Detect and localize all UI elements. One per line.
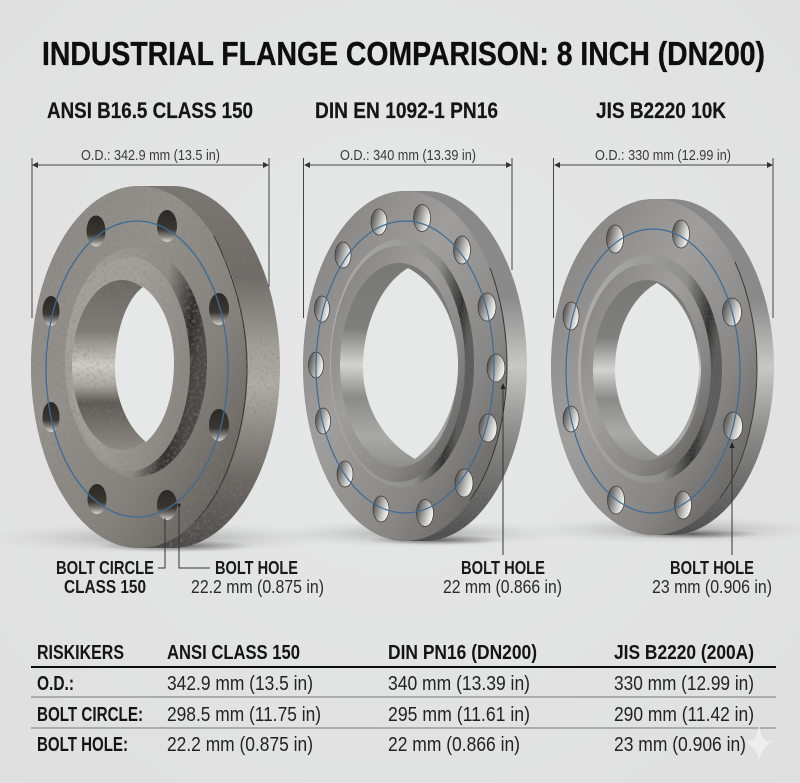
row: bolt circle: 290 mm (11.42 in) [614,704,754,726]
flange: JIS B2220 10K [551,199,774,535]
callout: DIN bolt hole [443,383,562,597]
table header: RISKIKERS [37,642,124,664]
table header: DIN PN16 (DN200) [388,642,537,664]
heading: JIS: JIS B2220 10K [596,98,726,123]
flange: ANSI B16.5 Class 150 [31,186,280,548]
callout: bolt circle class 150: BOLT CIRCLE [56,557,154,578]
bolt circle [46,221,228,517]
row: bolt hole: 22 mm (0.866 in) [388,734,520,756]
callout: bolt circle class 150: CLASS 150 [64,576,146,597]
table header [37,642,754,664]
bore opening [363,268,458,459]
callout: DIN bolt hole: 22 mm (0.866 in) [443,577,562,597]
bolt circle [566,229,740,513]
heading: DIN: DIN EN 1092-1 PN16 [315,98,498,123]
dimension: ANSI outer diameter: O.D.: 342.9 mm (13.5 in) [81,147,220,164]
comparison table [31,642,776,756]
row: O.D.: O.D.: [37,673,74,695]
flange: DIN EN 1092-1 PN16 [303,191,527,541]
callout: ANSI bolt hole: 22.2 mm (0.875 in) [191,577,324,597]
dimension: ANSI outer diameter [32,147,269,318]
bolt holes [308,204,505,526]
bore opening [115,287,174,442]
bolt circle [316,221,494,513]
dimension: JIS outer diameter: O.D.: 330 mm (12.99 in) [595,147,731,164]
table header: ANSI CLASS 150 [167,642,300,664]
row: bolt hole: BOLT HOLE: [37,734,128,756]
row: bolt hole: 22.2 mm (0.875 in) [167,734,313,756]
dimension: DIN outer diameter: O.D.: 340 mm (13.39 in) [340,147,476,164]
table header: JIS B2220 (200A) [614,642,754,664]
row: bolt hole: 23 mm (0.906 in) [614,734,746,756]
row: O.D. [37,673,754,695]
callout: DIN bolt hole: BOLT HOLE [461,557,545,578]
bolt holes [563,220,742,519]
dimension: JIS outer diameter [554,147,773,318]
callout: JIS bolt hole: 23 mm (0.906 in) [652,577,772,597]
callout: JIS bolt hole [652,442,772,597]
floor shadows [0,516,800,554]
icon: sparkle watermark [744,724,774,760]
callout: JIS bolt hole: BOLT HOLE [670,557,754,578]
row: bolt circle: BOLT CIRCLE: [37,704,143,726]
heading: ANSI: ANSI B16.5 CLASS 150 [47,98,253,123]
row: bolt circle: 298.5 mm (11.75 in) [167,704,321,726]
row: O.D.: 340 mm (13.39 in) [388,673,530,695]
row: bolt circle: 295 mm (11.61 in) [388,704,530,726]
row: bolt hole [37,734,746,756]
dimension: DIN outer diameter [304,147,512,318]
callout: bolt circle class 150 [56,518,165,597]
callout: ANSI bolt hole [177,503,324,597]
row: O.D.: 330 mm (12.99 in) [614,673,754,695]
callout: ANSI bolt hole: BOLT HOLE [215,557,298,578]
bolt holes [42,210,229,520]
row: bolt circle [37,704,754,726]
bore opening [615,283,699,456]
row: O.D.: 342.9 mm (13.5 in) [167,673,313,695]
